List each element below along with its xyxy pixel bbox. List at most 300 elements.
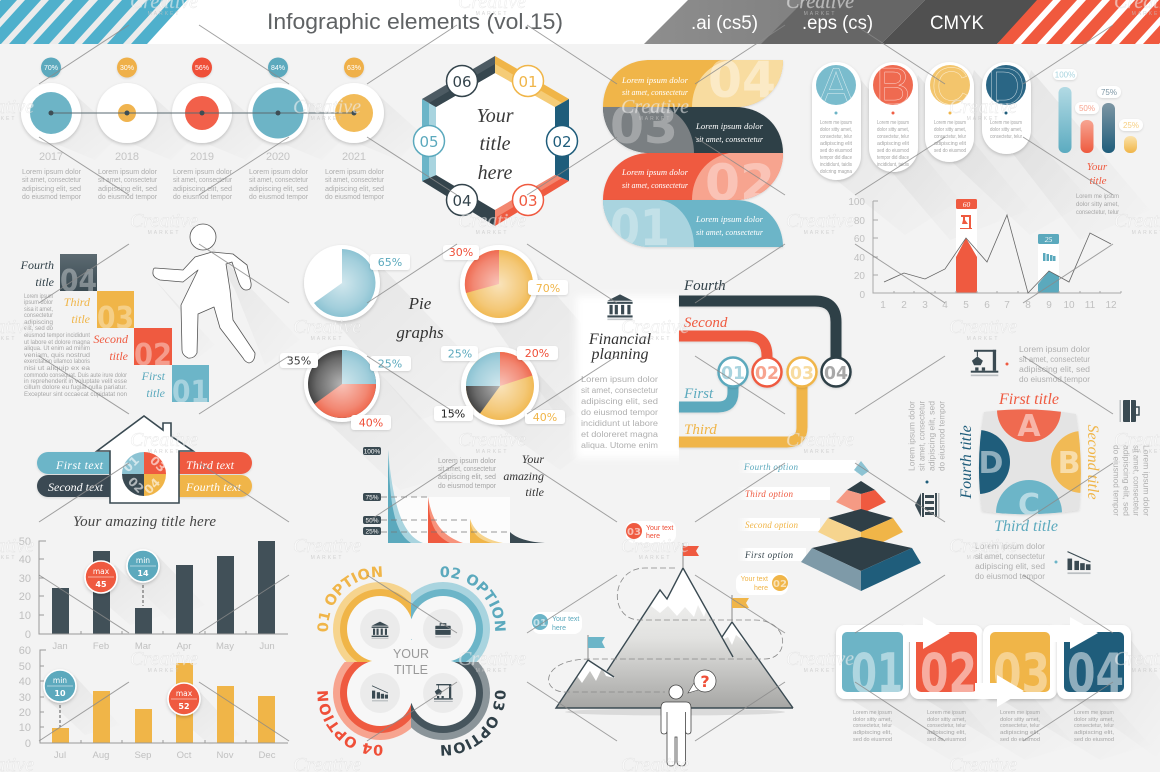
connector node 02: 02 <box>755 363 779 384</box>
timeline 2021: 2021 <box>342 151 366 163</box>
square 3 text: adipiscing elit, <box>1000 730 1041 736</box>
ring 01 <box>333 582 411 662</box>
option 03 label: 03 OPTION <box>441 690 506 756</box>
hexagon diagram <box>414 56 578 226</box>
square 4 text: adipiscing elit, <box>1074 730 1115 736</box>
square 2 text: adipiscing elit, <box>927 730 967 736</box>
staircase paragraph: Excepteur sint occaecat cupidatat non <box>24 392 127 398</box>
ring 04 <box>333 662 411 740</box>
pill D: dolor sitty amet, <box>990 127 1022 133</box>
pill B: adipiscing elit <box>877 141 909 147</box>
bar chart second half <box>19 645 288 761</box>
hexagon title: title <box>479 133 511 155</box>
timeline 2018: Lorem ipsum dolor <box>98 169 158 176</box>
text block: right rotated: adipiscing elit, sed <box>1122 445 1130 516</box>
line chart x labels: 7 <box>1004 300 1010 311</box>
hexagon node 03: 03 <box>518 192 538 210</box>
text: Creative <box>293 535 361 557</box>
square 4 text: Lorem me ipsum <box>1074 710 1114 716</box>
y labels: 60 <box>19 645 31 657</box>
icon: crane <box>434 684 453 702</box>
square 1 text: Lorem me ipsum <box>853 710 892 716</box>
curve 25 <box>510 532 545 543</box>
curve chart text: adipiscing elit, sed <box>438 474 496 481</box>
pie 25/40/35: 35% <box>287 354 311 368</box>
highlight bar 5 <box>956 199 977 293</box>
house pie: 01 <box>120 453 142 475</box>
pie 30/70 <box>443 245 568 323</box>
hexagon node 06 <box>446 66 478 96</box>
square 3 text: consectetur, telur <box>1000 723 1040 729</box>
arrow 2 <box>1050 617 1098 649</box>
callout 01: Your text <box>552 616 579 623</box>
square 1 text: consectetur, telur <box>853 723 892 729</box>
pyramid level middle <box>818 509 903 553</box>
pill C: Lorem me ipsum <box>934 120 966 126</box>
label pill: first text: First text <box>55 458 104 472</box>
square 03 <box>983 625 1057 705</box>
max bubble: 45 <box>95 580 107 589</box>
pie 30/70: 70% <box>536 282 560 295</box>
pie 25/40/35: 40% <box>359 416 383 430</box>
text block: bottom: adipiscing elit, sed <box>975 562 1045 571</box>
timeline 2020: 84% <box>271 65 285 72</box>
format tab: cmyk: CMYK <box>930 13 984 34</box>
step 02: 02 <box>134 338 172 373</box>
ABCD square diagram <box>908 345 1150 581</box>
step 04: Fourth <box>20 258 54 272</box>
square 2 text: sed do eiusmod <box>927 737 966 743</box>
staircase paragraph: nisi ut aliquip ex ea <box>24 366 91 372</box>
hexagon node 02 <box>546 126 578 156</box>
pill B: tempor did dlace <box>877 155 909 161</box>
timeline 2018: sit amet, consectetur <box>98 177 158 184</box>
axes <box>40 650 288 743</box>
financial paragraph: adipiscing elit, sed <box>581 397 658 406</box>
text: Creative <box>786 210 854 232</box>
financial paragraph <box>581 375 659 450</box>
connector dark <box>679 301 836 372</box>
y labels: 30 <box>19 573 31 585</box>
pill A: sed do eiusmod <box>820 148 852 154</box>
timeline 2019: sit amet, consectetur <box>173 177 233 184</box>
square titles: Second title <box>1084 424 1101 500</box>
square 1 text: adipiscing elit, <box>853 730 893 736</box>
cylinder 50% <box>1075 102 1099 153</box>
connector node 03: 03 <box>790 363 814 384</box>
text: Creative <box>621 535 689 557</box>
text: MARKET <box>148 449 180 455</box>
cylinder 25%: 25% <box>1123 121 1139 130</box>
highlight bar 9: 25 <box>1045 235 1052 244</box>
text block: right rotated: Lorem ipsum dolor <box>1142 445 1150 516</box>
option label bars <box>738 460 856 561</box>
line chart y labels: 40 <box>854 253 865 264</box>
route dashes <box>549 568 783 692</box>
timeline 2018: adipiscing elit, sed <box>98 186 157 193</box>
title: Infographic elements (vol.15) <box>267 9 563 34</box>
icon: chart <box>1068 552 1090 574</box>
x labels: Aug <box>93 750 109 761</box>
ribbon 02: sit amet, consectetur <box>622 180 689 190</box>
timeline 2018: 2018 <box>115 151 139 163</box>
square 3 text: dolor sitty amet, <box>1000 717 1040 723</box>
label pill: third text: Third text <box>186 458 235 472</box>
line chart x labels: 5 <box>963 300 969 311</box>
connector node 03 <box>788 358 816 386</box>
line chart y labels: 80 <box>854 216 865 227</box>
y labels: 0 <box>25 629 31 641</box>
timeline 2019: adipiscing elit, sed <box>173 186 232 193</box>
square 4 text: sed do eiusmod <box>1074 737 1114 743</box>
timeline 2017: do eiusmod tempor <box>22 194 82 201</box>
text: MARKET <box>639 555 671 561</box>
flag gold <box>732 595 749 622</box>
text: MARKET <box>148 11 180 17</box>
cylinder chart text <box>1076 194 1119 216</box>
text: MARKET <box>804 668 836 674</box>
callout 03 <box>626 521 676 543</box>
square titles <box>958 391 1101 535</box>
hexagon node 05: 05 <box>419 133 439 151</box>
ribbon 02: 02 <box>705 154 775 212</box>
y labels: 20 <box>19 591 31 603</box>
option clover diagram <box>317 566 506 756</box>
ribbon stack <box>603 51 783 257</box>
text block: top: Lorem ipsum dolor <box>1019 345 1090 354</box>
timeline 2021: adipiscing elit, sed <box>325 186 384 193</box>
step 02: Second <box>93 332 129 346</box>
connector node 02 <box>752 358 782 386</box>
callout 02: here <box>754 585 768 592</box>
timeline 2021: do eiusmod tempor <box>325 194 385 201</box>
staircase paragraph: commodo consequat. Duis aute irure dolor <box>24 373 127 379</box>
text block: right rotated: sit amet, consectetur <box>1132 445 1140 516</box>
financial paragraph: et doloreret magna <box>581 430 659 439</box>
house pie <box>120 452 169 497</box>
staircase paragraph: ipsum dolor <box>24 300 53 306</box>
pill D: D <box>987 58 1025 116</box>
line chart y labels: 20 <box>854 271 865 282</box>
timeline 2019: 56% <box>195 65 209 72</box>
pill A: tempor did dlace <box>820 155 852 161</box>
pill B: dolor sitty amet, <box>877 127 909 133</box>
text: MARKET <box>967 116 999 122</box>
connector node 01: 01 <box>721 363 745 384</box>
line chart x labels: 11 <box>1085 300 1096 311</box>
timeline 2019: 2019 <box>190 151 214 163</box>
callout 01 <box>532 612 582 634</box>
pill B: consectetur, telur <box>877 134 909 140</box>
option labels: First option <box>744 550 794 560</box>
timeline 2019 <box>172 58 233 201</box>
step 01: title <box>146 386 166 400</box>
icon: standing person <box>661 685 691 766</box>
x labels: Jul <box>54 750 66 761</box>
pill D: consectetur, telur <box>990 134 1022 140</box>
timeline 2021 <box>324 58 385 201</box>
text block: top: adipiscing elit, sed <box>1019 365 1090 374</box>
line chart x labels: 2 <box>901 300 907 311</box>
cylinder 25% <box>1119 119 1143 153</box>
text: Creative <box>949 96 1017 118</box>
financial title <box>588 331 652 363</box>
pill B: sed do eiusmod <box>877 148 909 154</box>
callout 02: Your text <box>741 576 768 583</box>
pill A: A <box>819 58 854 116</box>
text: MARKET <box>311 116 343 122</box>
icon: bank <box>372 622 388 639</box>
pill A: consectetur, telur <box>820 134 852 140</box>
financial paragraph: Lorem ipsum dolor <box>581 375 658 384</box>
curve chart labels: 25% <box>365 528 379 536</box>
text block: right rotated: do eiusmod tempor <box>1112 445 1120 516</box>
line chart <box>848 197 1121 311</box>
connector node 04: 04 <box>824 363 848 384</box>
mountain body <box>556 568 793 708</box>
text: Creative <box>949 316 1017 338</box>
timeline 2021: sit amet, consectetur <box>325 177 385 184</box>
timeline 2021: 63% <box>347 65 361 72</box>
line chart x labels: 12 <box>1105 300 1117 311</box>
callout 01: here <box>552 625 566 632</box>
text: MARKET <box>476 449 508 455</box>
min bubble <box>44 670 76 702</box>
bars <box>52 541 275 634</box>
pill A <box>812 58 861 180</box>
cylinder chart title: title <box>1089 175 1107 187</box>
pie graphs title: Pie <box>408 294 432 313</box>
step 02: title <box>109 349 129 363</box>
pill C: C <box>931 58 969 116</box>
dot red <box>1006 362 1008 366</box>
option labels: Fourth option <box>743 462 798 472</box>
max bubble: max <box>93 567 110 576</box>
text: MARKET <box>804 449 836 455</box>
y labels: 40 <box>19 676 31 688</box>
icon: bank <box>607 294 633 320</box>
max bubble: 52 <box>178 702 190 711</box>
pie 65% <box>304 245 410 321</box>
hexagon title: here <box>478 162 513 184</box>
x labels <box>52 641 275 652</box>
quadrants <box>978 409 1081 514</box>
step 01: First <box>141 369 166 383</box>
hexagon title: Your <box>476 105 514 127</box>
min connector <box>142 585 144 606</box>
curve chart title: title <box>525 485 545 499</box>
line chart series <box>884 215 1111 293</box>
icon: chart <box>372 686 388 701</box>
line chart x labels: 3 <box>922 300 928 311</box>
curve 100 <box>388 450 423 543</box>
clover centre <box>347 596 476 726</box>
ribbon 04: sit amet, consectetur <box>622 87 689 97</box>
text: MARKET <box>804 230 836 236</box>
text block: bottom: do eiusmod tempor <box>975 572 1045 581</box>
arrow squares panel <box>836 617 1131 743</box>
hexagon node 01 <box>512 66 544 96</box>
question bubble <box>688 670 716 693</box>
staircase paragraph: sisa it amet, <box>24 307 53 313</box>
pill B: incididunt, taidis <box>877 162 909 168</box>
ribbon 01: sit amet, consectetur <box>696 227 764 237</box>
ribbon 03: Lorem ipsum dolor <box>695 121 764 131</box>
text: Creative <box>130 429 198 451</box>
square 02 <box>910 625 983 705</box>
text: MARKET <box>639 336 671 342</box>
cylinder chart title <box>1087 161 1108 187</box>
highlight bar 5: 60 <box>963 200 970 209</box>
square titles: Fourth title <box>958 425 975 500</box>
ribbon 02 <box>602 153 784 200</box>
y labels: 50 <box>19 661 31 673</box>
pie 25/20/40/15 <box>434 346 565 425</box>
y labels <box>19 645 31 750</box>
square 4 text: dolor sitty amet, <box>1074 717 1114 723</box>
x labels: Nov <box>217 750 234 761</box>
curve chart text: do eiusmod tempor <box>438 483 497 490</box>
pie 25/40/35: 25% <box>378 358 402 370</box>
min connector <box>59 705 61 727</box>
text: Creative <box>458 210 526 232</box>
staircase panel <box>20 224 255 410</box>
label pill: fourth text <box>175 475 252 497</box>
cylinder 75% <box>1097 86 1121 153</box>
bars <box>52 663 275 743</box>
callout 03: here <box>646 533 660 540</box>
text: MARKET <box>311 336 343 342</box>
line chart x labels: 8 <box>1025 300 1031 311</box>
curve chart dashes <box>381 497 510 532</box>
pie graphs <box>280 245 568 430</box>
hexagon node 06: 06 <box>452 73 472 91</box>
curve chart title: amazing <box>503 469 544 483</box>
x labels: Jun <box>259 641 275 652</box>
house pie: 02 <box>125 474 147 496</box>
square 3 text <box>1000 710 1041 743</box>
min bubble: min <box>53 676 67 685</box>
curve chart text: sit amet, consectetur <box>438 466 497 473</box>
square 4 text <box>1074 710 1115 743</box>
clover discs <box>360 609 463 713</box>
hexagon node 05 <box>414 126 444 156</box>
financial title: Financial <box>588 331 652 348</box>
cylinder chart title: Your <box>1087 161 1108 173</box>
text: Creative <box>458 648 526 670</box>
text block: right rotated <box>1112 445 1150 516</box>
text block: left rotated: sit amet, consectetur <box>918 401 926 471</box>
text block: left rotated: do eiusmod tempor <box>938 401 946 471</box>
square titles: Third title <box>994 518 1058 535</box>
square 04: 04 <box>1067 642 1124 705</box>
text: Creative <box>621 96 689 118</box>
staircase paragraph: eiusmod tempor incididunt <box>24 333 90 339</box>
y labels: 0 <box>25 738 31 750</box>
text block: bottom: Lorem ipsum dolor <box>975 542 1045 551</box>
staircase paragraph: aliqua. Ut enim ad minim <box>24 346 90 352</box>
x labels: Apr <box>177 641 191 652</box>
text: MARKET <box>311 555 343 561</box>
x labels: Feb <box>93 641 109 652</box>
x labels: Oct <box>177 750 192 761</box>
callout 03: 03 <box>627 527 641 538</box>
icon: running person <box>153 224 255 363</box>
callout 03: Your text <box>646 525 673 532</box>
text: Creative <box>130 210 198 232</box>
timeline 2018: 30% <box>120 65 134 72</box>
y labels: 10 <box>19 722 31 734</box>
timeline 2017: adipiscing elit, sed <box>22 186 81 193</box>
square 01: 01 <box>851 642 903 705</box>
timeline 2019: Lorem ipsum dolor <box>173 169 233 176</box>
y labels: 20 <box>19 707 31 719</box>
square 2 text: consectetur, telur <box>927 723 966 729</box>
cylinder 100% <box>1053 69 1077 153</box>
text: MARKET <box>476 668 508 674</box>
x labels: May <box>216 641 234 652</box>
y labels: 40 <box>19 554 31 566</box>
y labels: 30 <box>19 692 31 704</box>
line chart x labels <box>880 300 1117 311</box>
connector labels <box>683 278 728 438</box>
hexagon node 04 <box>446 184 478 216</box>
option labels <box>743 462 798 560</box>
timeline panel <box>21 58 385 201</box>
bar chart first half <box>19 536 288 652</box>
ABCD pills <box>812 58 1031 180</box>
square 2 text <box>927 710 967 743</box>
line chart axes <box>873 201 1121 293</box>
max bubble <box>85 561 117 593</box>
highlight bar 9 <box>1038 234 1059 293</box>
timeline 2017: 70% <box>44 65 58 72</box>
pie 25/20/40/15: 15% <box>441 408 465 420</box>
cylinder 100%: 100% <box>1055 70 1075 80</box>
staircase paragraph: in reprehenderit in voluptate velit esse <box>24 379 128 385</box>
square 01 <box>836 625 909 705</box>
x labels: Sep <box>135 750 151 761</box>
text: Creative <box>293 96 361 118</box>
ribbon 01 <box>602 200 784 248</box>
timeline 2020: Lorem ipsum dolor <box>249 169 309 176</box>
timeline 2020: do eiusmod tempor <box>249 194 309 201</box>
flag red <box>683 543 699 568</box>
ribbon 02: Lorem ipsum dolor <box>621 167 689 177</box>
ribbon 01: 01 <box>610 199 670 257</box>
format tab: eps <box>761 0 925 44</box>
snow caps <box>577 568 745 683</box>
header teal stripes <box>0 0 187 44</box>
option labels: Third option <box>745 489 794 499</box>
square 03: 03 <box>993 642 1050 705</box>
pie 25/20/40/15: 25% <box>448 348 472 360</box>
staircase paragraph: exercitation ullamco laboris <box>24 359 90 365</box>
curve chart text <box>438 458 497 490</box>
min bubble: 10 <box>54 689 66 698</box>
dot teal <box>1054 560 1058 564</box>
pill B: Lorem me ipsum <box>877 120 909 126</box>
timeline axis <box>48 110 356 116</box>
step 01 <box>141 365 209 410</box>
step 04: title <box>35 275 55 289</box>
quadrants: B <box>1058 446 1080 481</box>
decay curve chart <box>363 447 545 543</box>
text: Creative <box>458 429 526 451</box>
timeline 2018: do eiusmod tempor <box>98 194 158 201</box>
text: MARKET <box>148 230 180 236</box>
option 04 label: 04 OPTION <box>317 691 382 756</box>
